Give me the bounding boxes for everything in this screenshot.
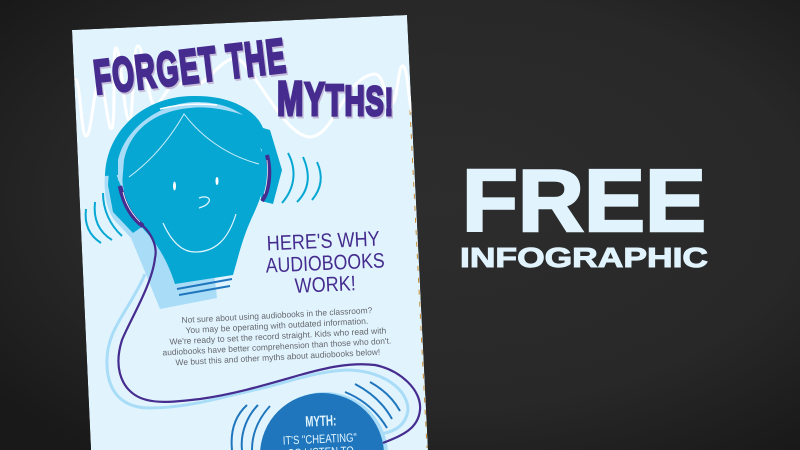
title line: myths: MYTHS! bbox=[278, 73, 394, 128]
intro paragraph: We're ready to set the record straight. Kids who read with bbox=[169, 325, 387, 347]
myth sound lines right bbox=[345, 382, 400, 428]
hair line bbox=[129, 114, 259, 177]
bulb base lines bbox=[177, 279, 232, 295]
poster edge bbox=[410, 110, 427, 448]
sound lines right bbox=[282, 153, 321, 203]
myth text: IT'S "CHEATING" bbox=[283, 430, 357, 448]
bulb shadow bbox=[104, 174, 217, 309]
headband bbox=[105, 96, 282, 204]
myth heading: MYTH: bbox=[305, 412, 337, 431]
subtitle: HERE'S WHY bbox=[266, 228, 380, 255]
ear pad left bbox=[120, 186, 143, 226]
title bbox=[93, 37, 394, 119]
nose bbox=[199, 197, 209, 208]
heading: INFOGRAPHIC: INFOGRAPHIC bbox=[460, 242, 708, 273]
intro paragraph: Not sure about using audiobooks in the classroom? bbox=[181, 305, 373, 325]
illustration: lightbulb head with headphones bbox=[105, 96, 282, 309]
smile bbox=[163, 214, 236, 252]
poster bbox=[72, 15, 428, 450]
poster sheet bbox=[72, 15, 428, 450]
intro paragraph bbox=[162, 305, 391, 367]
subtitle bbox=[266, 231, 384, 293]
ear pad right bbox=[262, 155, 269, 201]
sound wave bbox=[75, 46, 412, 137]
intro paragraph: audiobooks have better comprehension than those who don't. bbox=[162, 336, 391, 357]
subtitle: WORK! bbox=[294, 272, 356, 298]
headband white line bbox=[160, 104, 217, 109]
light cable bbox=[107, 274, 408, 434]
title line: forget the: FORGET THE bbox=[91, 29, 288, 105]
title line: myths: MYTHS! bbox=[277, 71, 393, 126]
sound lines left bbox=[86, 193, 122, 243]
heading: FREE: FREE bbox=[462, 151, 706, 250]
eyes bbox=[173, 182, 176, 190]
intro paragraph: We bust this and other myths about audiobooks below! bbox=[175, 347, 380, 367]
myth sound lines left bbox=[232, 405, 270, 450]
headband highlight bbox=[118, 102, 243, 185]
purple cable bbox=[118, 225, 420, 443]
title line: forget the: FORGET THE bbox=[92, 31, 289, 107]
ear cup left bbox=[108, 175, 141, 233]
intro paragraph: You may be operating with outdated information. bbox=[185, 316, 368, 335]
bulb head bbox=[122, 105, 265, 284]
myth circle bbox=[260, 392, 388, 450]
subtitle: AUDIOBOOKS bbox=[265, 249, 385, 278]
